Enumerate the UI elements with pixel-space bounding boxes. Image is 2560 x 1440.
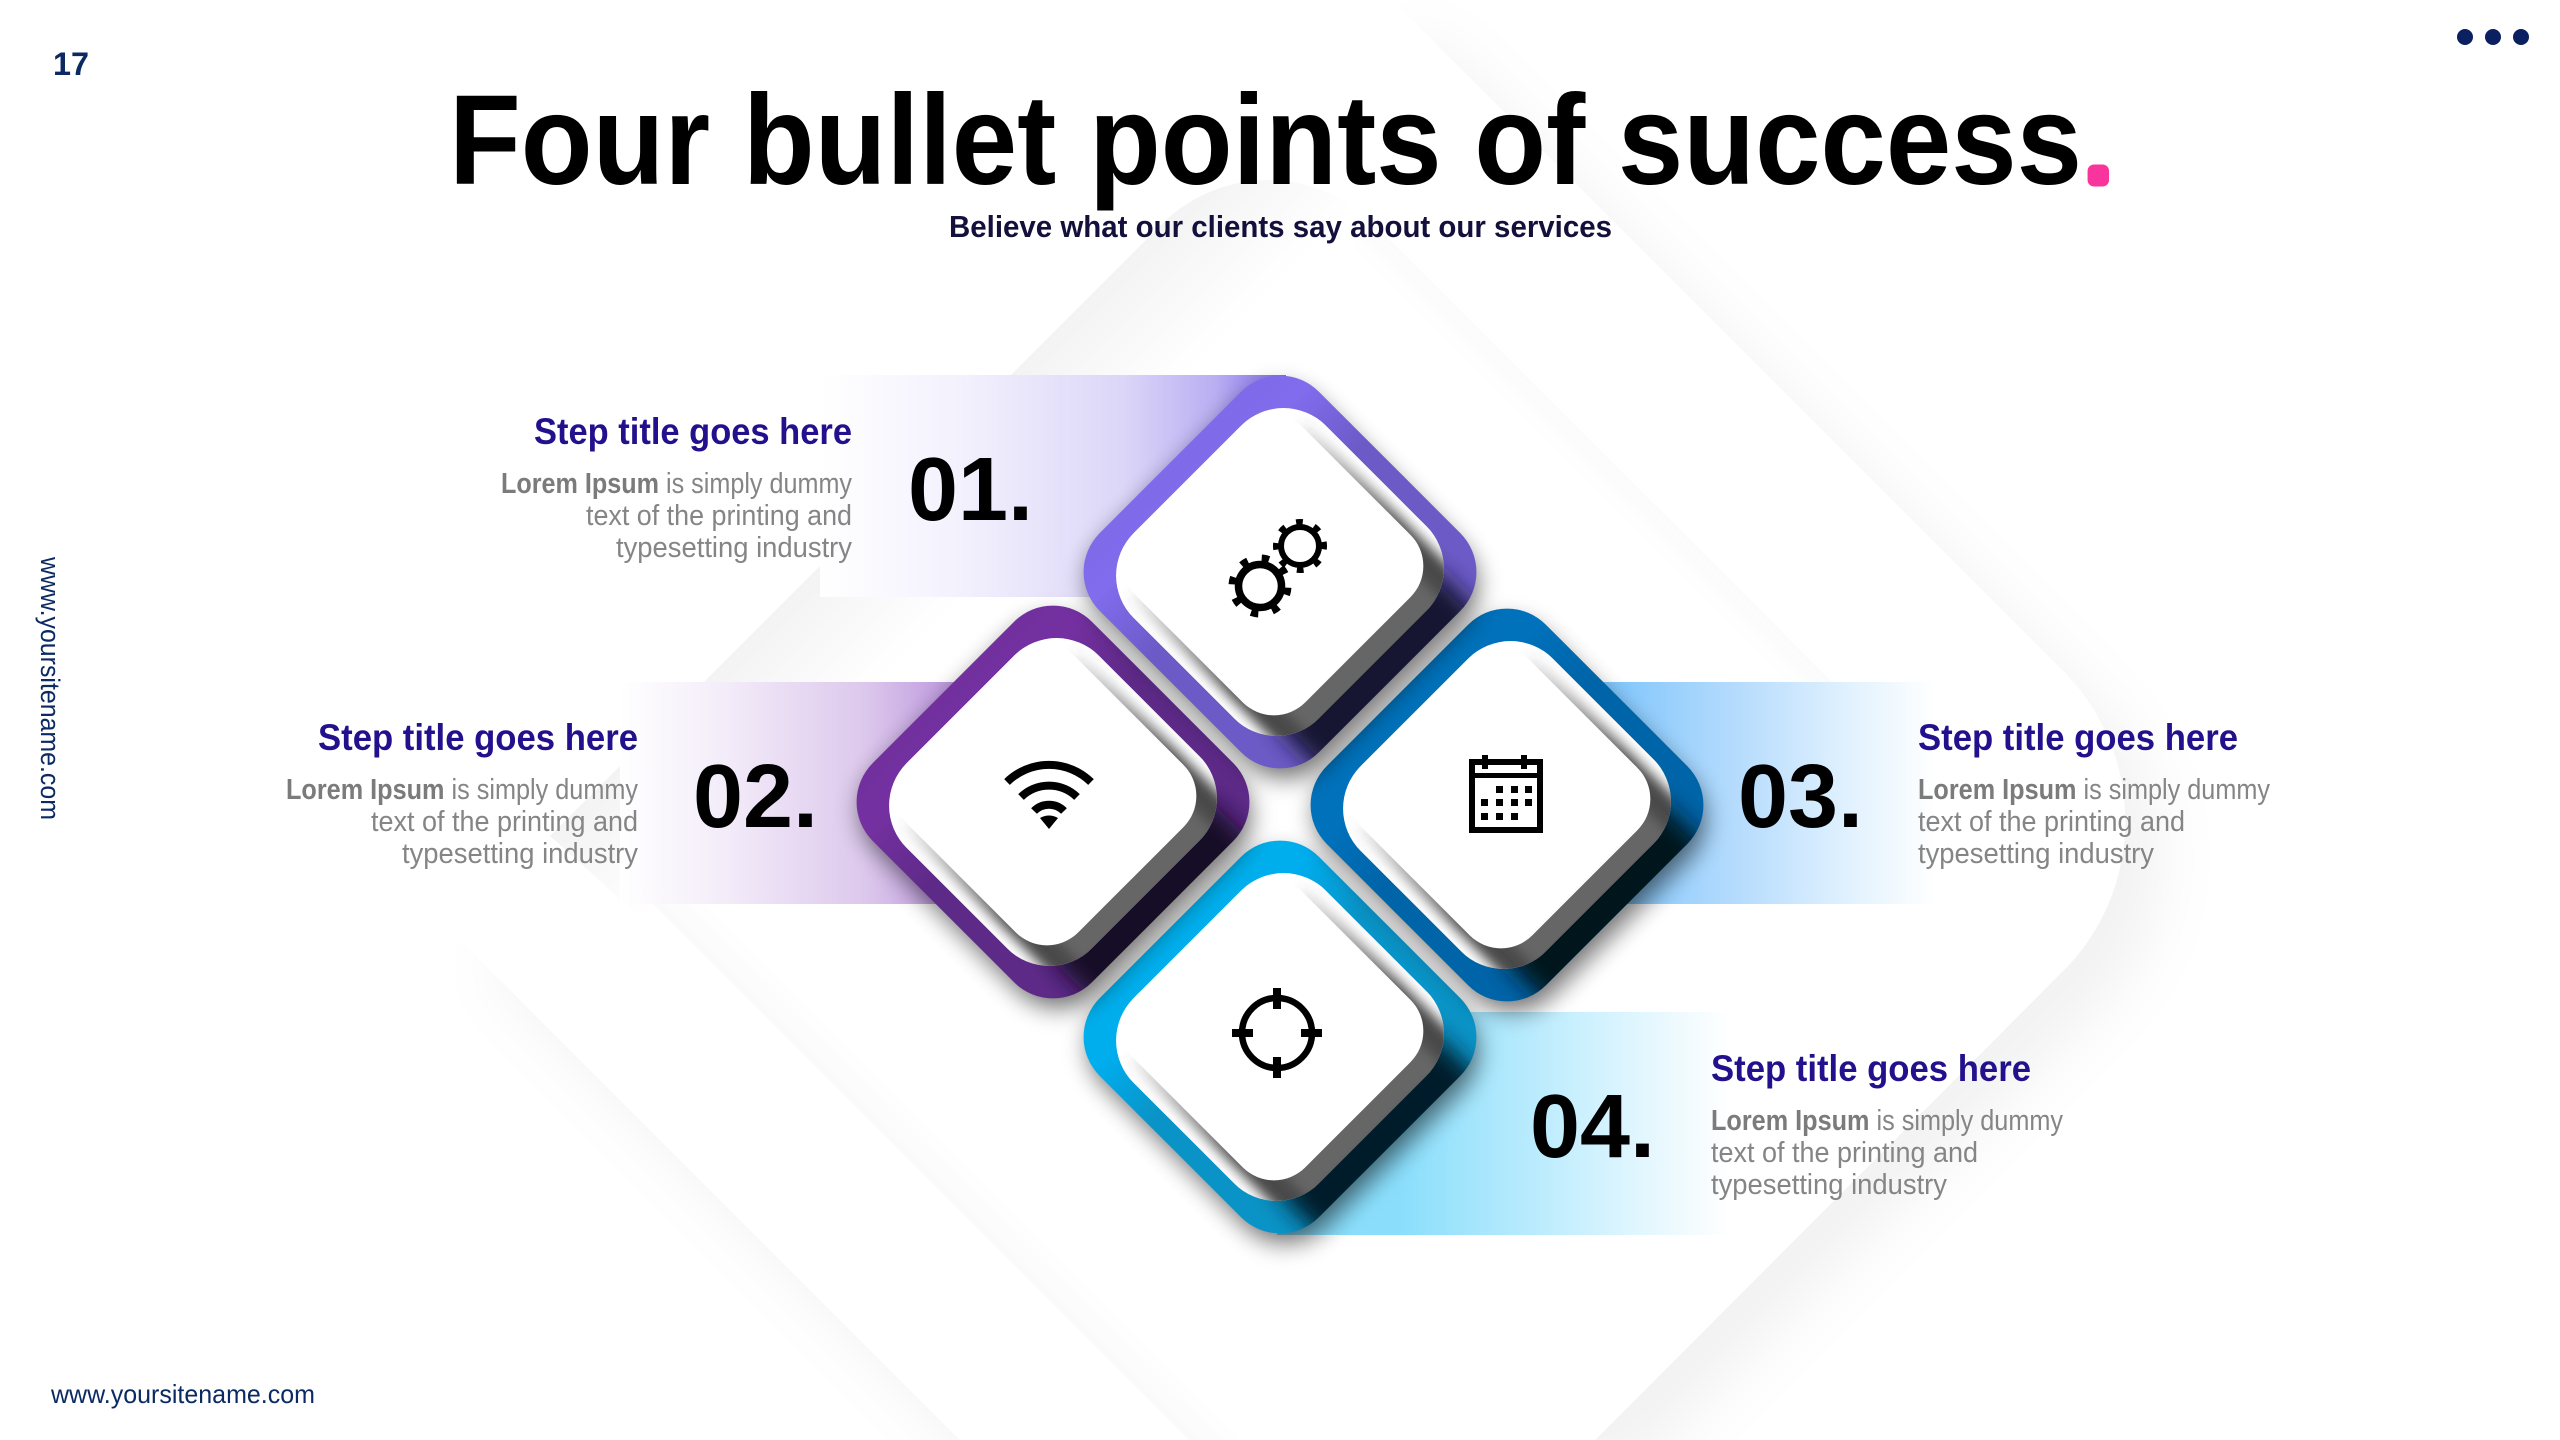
panel: band 04 [1277, 1012, 1730, 1235]
text block: step 04 [1711, 1048, 2063, 1201]
number 02: 02. [693, 747, 818, 847]
icon: gears [1232, 522, 1324, 614]
background: soft diamond shapes [453, 0, 2125, 1440]
number 04: 04. [1530, 1077, 1655, 1177]
title: Four bullet points of success [449, 69, 2082, 212]
text block: step 01: Lorem Ipsum is simply dummy [501, 468, 852, 500]
text block: step 01: typesetting industry [616, 532, 852, 564]
text block: step 01: Step title goes here [534, 411, 852, 452]
text block: step 02: text of the printing and [371, 806, 638, 838]
text block: step 01: text of the printing and [586, 500, 852, 532]
panel: band 03 [1580, 682, 1935, 904]
diamond 02 [844, 602, 1267, 1024]
icon: calendar [1472, 755, 1540, 830]
text block: step 03: text of the printing and [1918, 806, 2185, 838]
text block: step 04: Step title goes here [1711, 1048, 2031, 1089]
text block: step 02: Step title goes here [318, 717, 638, 758]
icon: wifi [1007, 765, 1091, 829]
panel: band 01 [820, 375, 1286, 597]
diamond 01 [1072, 372, 1494, 794]
text block: step 03 [1918, 717, 2270, 870]
diamond 04 [1072, 837, 1494, 1260]
vertical website text: www.yoursitename.com [35, 556, 65, 820]
subtitle: Believe what our clients say about our services [949, 209, 1612, 244]
menu dots [2457, 29, 2529, 45]
text block: step 04: typesetting industry [1711, 1169, 1947, 1201]
text block: step 02: Lorem Ipsum is simply dummy [286, 774, 638, 806]
number 03: 03. [1738, 747, 1863, 847]
number 01: 01. [908, 440, 1033, 540]
icon: crosshair [1232, 988, 1322, 1078]
text block: step 01 [501, 411, 852, 564]
panel: band 02 [620, 682, 970, 904]
text block: step 02: typesetting industry [402, 838, 638, 870]
page number: 17 [53, 46, 89, 82]
footer website text: www.yoursitename.com [50, 1379, 315, 1409]
text block: step 04: text of the printing and [1711, 1137, 1978, 1169]
diamond 03 [1298, 605, 1721, 1028]
text block: step 04: Lorem Ipsum is simply dummy [1711, 1105, 2063, 1137]
text block: step 02 [286, 717, 638, 870]
text block: step 03: typesetting industry [1918, 838, 2154, 870]
text block: step 03: Lorem Ipsum is simply dummy [1918, 774, 2270, 806]
text block: step 03: Step title goes here [1918, 717, 2238, 758]
title: . [2090, 126, 2107, 193]
